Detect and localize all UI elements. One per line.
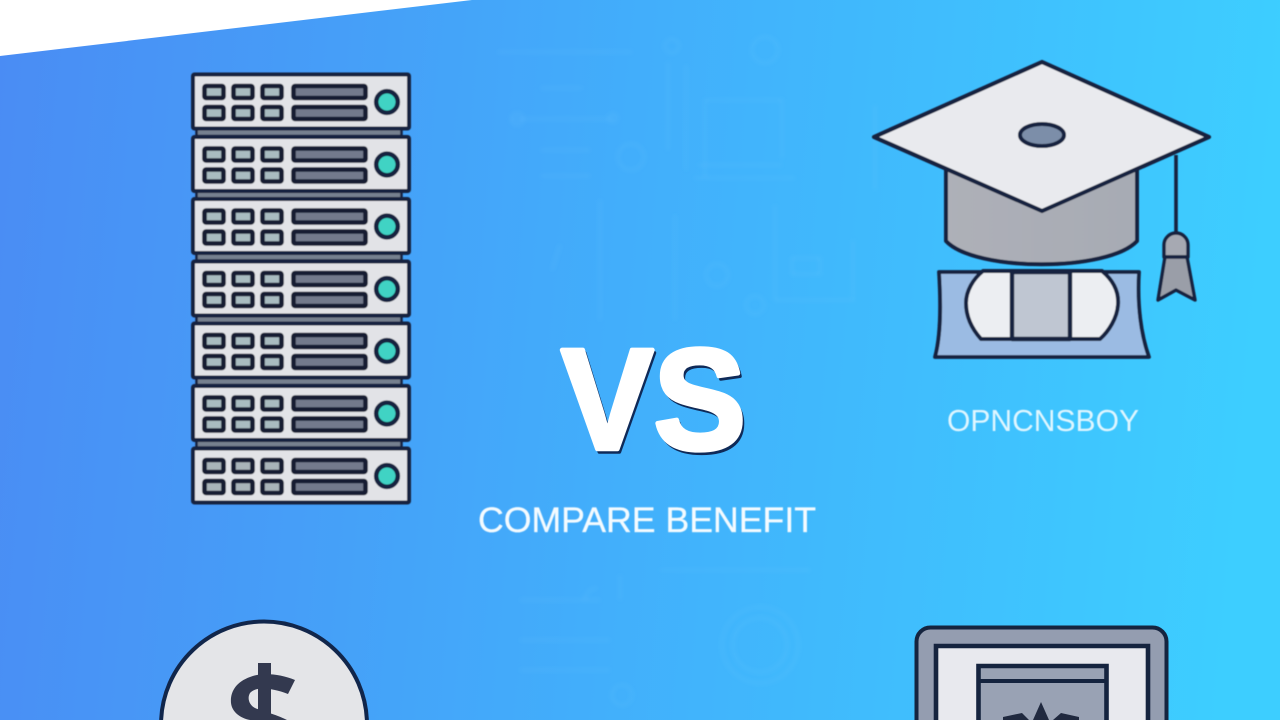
faint background pattern of tech outlines — [498, 37, 875, 705]
monitor screen — [936, 646, 1148, 720]
crown glyph — [1003, 702, 1079, 720]
VS heading: VS — [561, 319, 746, 480]
tassel — [1158, 233, 1195, 300]
server unit 3 — [193, 199, 409, 260]
white corner shape — [0, 0, 472, 56]
icon: dollar coin — [161, 622, 367, 720]
scroll backing — [935, 272, 1149, 357]
diploma scroll — [966, 271, 1118, 339]
label under graduation cap: OPNCNSBOY — [947, 403, 1139, 438]
server unit 4 — [193, 262, 409, 323]
monitor frame — [916, 628, 1166, 720]
VS heading: VS — [563, 322, 748, 483]
server unit 7 — [193, 448, 409, 502]
tassel cord — [1174, 155, 1178, 233]
server unit 2 — [193, 137, 409, 198]
cap base — [946, 170, 1137, 264]
icon: monitor — [916, 628, 1166, 720]
server unit 5 — [193, 324, 409, 385]
subtitle: compare benefit: COMPARE BENEFIT — [478, 501, 816, 540]
server unit 6 — [193, 386, 409, 448]
server unit 1 — [193, 74, 409, 136]
icon: graduation cap — [874, 62, 1209, 357]
cap button — [1020, 124, 1064, 146]
icon: server rack — [193, 74, 409, 502]
window — [978, 666, 1106, 720]
mortarboard — [874, 62, 1209, 211]
